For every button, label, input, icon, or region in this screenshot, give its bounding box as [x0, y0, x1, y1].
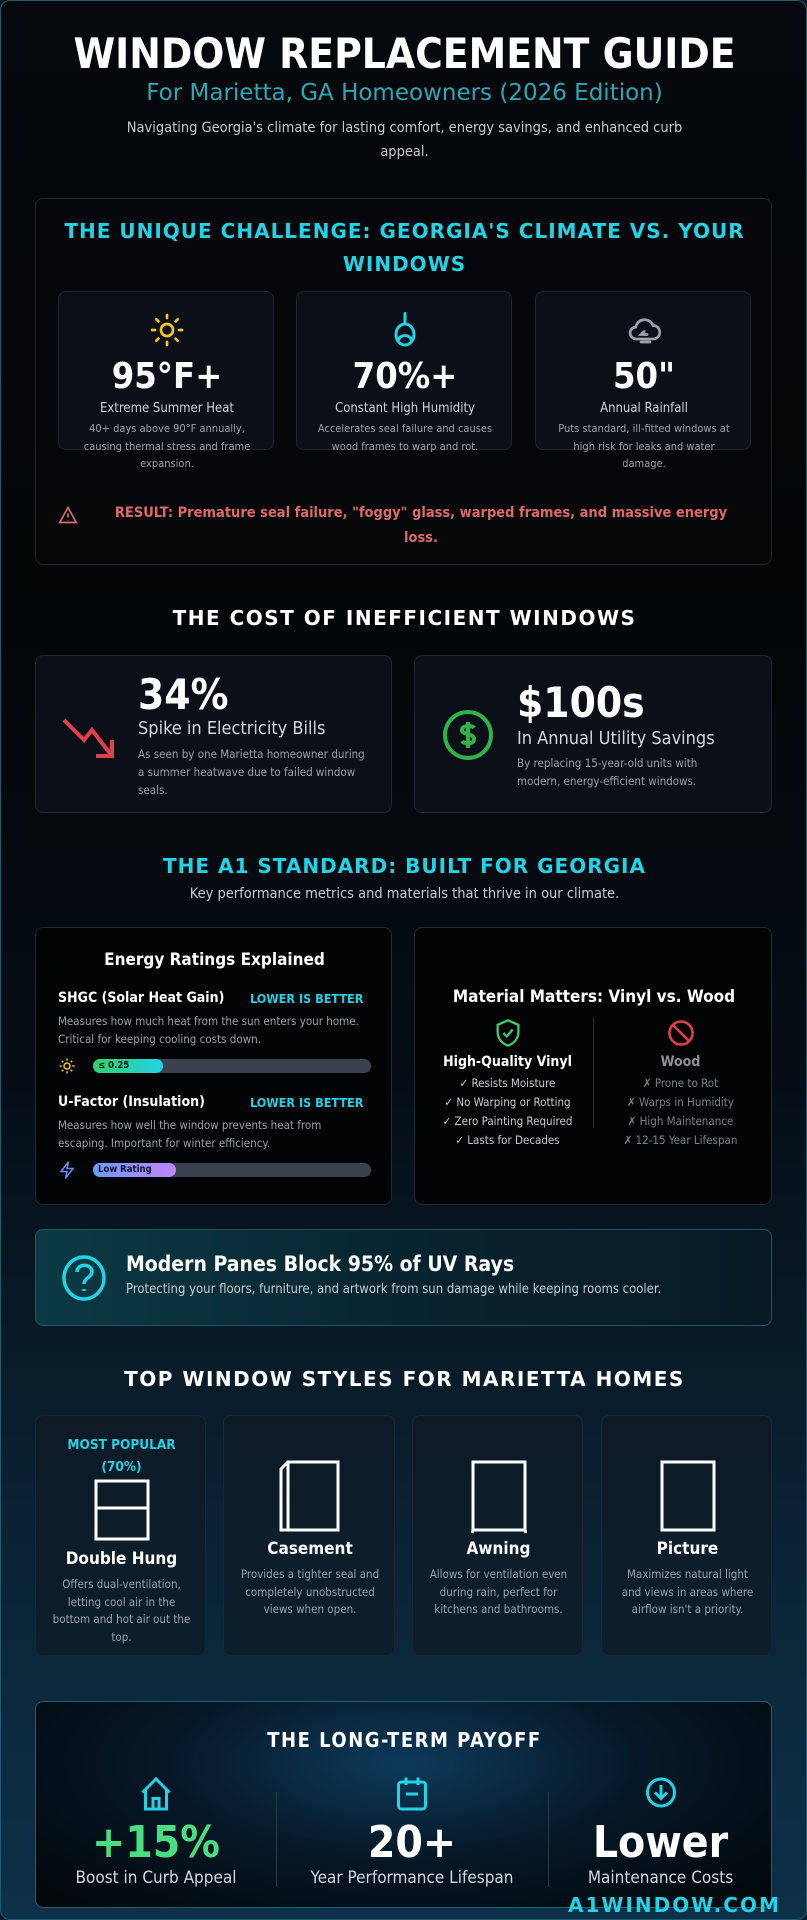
panel: materials: Material Matters: Vinyl vs. Wood — [453, 987, 735, 1007]
panel: energy ratings: Measures how much heat from the sun enters your home. Critical for keeping cooling costs down. — [58, 1014, 359, 1046]
card: picture — [601, 1415, 772, 1656]
stat: lifespan: 20+ — [368, 1817, 456, 1868]
stat: curb appeal — [76, 1777, 236, 1888]
result callout: RESULT: Premature seal failure, "foggy" glass, warped frames, and massive energy loss. — [115, 505, 727, 546]
icon: drop — [394, 312, 416, 346]
card: 34% — [35, 655, 392, 813]
panel: energy ratings: Measures how well the window prevents heat from escaping. Important for winter efficiency. — [58, 1118, 321, 1150]
panel: energy ratings: U-Factor (Insulation) — [58, 1094, 205, 1110]
column: vinyl: ✓ Lasts for Decades — [455, 1133, 560, 1147]
callout: UV rays: Protecting your floors, furniture, and artwork from sun damage while keeping rooms cooler. — [126, 1282, 661, 1297]
icon: sun — [150, 314, 184, 346]
icon: dollar circle — [443, 710, 493, 760]
stat: maintenance: Maintenance Costs — [588, 1868, 733, 1888]
callout: UV rays: Modern Panes Block 95% of UV Rays — [126, 1252, 514, 1276]
icon: warning — [58, 506, 78, 524]
card: $100s — [414, 655, 772, 813]
title: WINDOW REPLACEMENT GUIDE — [73, 29, 736, 78]
icon: trending down — [62, 718, 114, 758]
card: humidity: Constant High Humidity — [335, 401, 475, 416]
bar: SHGC — [60, 1058, 371, 1074]
card: double hung — [35, 1415, 206, 1656]
column: wood — [624, 1020, 737, 1147]
card: $100s: $100s — [517, 678, 645, 727]
panel: climate challenge — [35, 198, 772, 565]
stat: maintenance: Lower — [593, 1817, 728, 1868]
card: 34%: Spike in Electricity Bills — [138, 718, 325, 739]
stat: maintenance — [588, 1778, 733, 1888]
card: casement: Provides a tighter seal and completely unobstructed views when open. — [241, 1567, 379, 1616]
card: heat: 95°F+ — [112, 356, 222, 397]
card: double hung: MOST POPULAR — [67, 1437, 176, 1453]
card: heat: Extreme Summer Heat — [100, 401, 234, 416]
icon: question — [62, 1255, 106, 1301]
stat: curb appeal: Boost in Curb Appeal — [76, 1868, 236, 1888]
heading: A1 standard: THE A1 STANDARD: BUILT FOR GEORGIA — [163, 854, 646, 878]
panel: energy ratings: SHGC (Solar Heat Gain) — [58, 990, 224, 1006]
card: rainfall: 50" — [613, 356, 675, 397]
subheading: Key performance metrics and materials that thrive in our climate. — [190, 886, 619, 902]
card: picture: Maximizes natural light and views in areas where airflow isn't a priority. — [622, 1567, 753, 1616]
panel: energy ratings: LOWER IS BETTER — [250, 991, 363, 1006]
icon: cloud — [628, 318, 662, 344]
panel: materials — [414, 927, 772, 1205]
callout: UV rays — [35, 1229, 772, 1326]
card: rainfall: Puts standard, ill-fitted windows at high risk for leaks and water damage. — [558, 422, 730, 470]
column: vinyl: ✓ Zero Painting Required — [443, 1114, 572, 1128]
stat: lifespan: Year Performance Lifespan — [310, 1868, 514, 1888]
column: wood: ✗ Prone to Rot — [643, 1076, 718, 1090]
heading: window styles: TOP WINDOW STYLES FOR MARIETTA HOMES — [124, 1367, 685, 1391]
column: vinyl: ✓ Resists Moisture — [460, 1076, 555, 1090]
card: awning — [412, 1415, 583, 1656]
panel: long-term payoff — [35, 1701, 772, 1908]
card: picture: Picture — [657, 1539, 718, 1559]
card: 34%: 34% — [138, 670, 228, 719]
column: vinyl: ✓ No Warping or Rotting — [444, 1095, 571, 1109]
card: double hung: Double Hung — [66, 1549, 177, 1569]
column: wood: Wood — [661, 1054, 700, 1070]
panel: energy ratings: Energy Ratings Explained — [104, 950, 325, 970]
card: heat — [58, 291, 274, 450]
card: double hung: Offers dual-ventilation, letting cool air in the bottom and hot air out the top. — [53, 1577, 190, 1644]
column: vinyl — [443, 1019, 572, 1147]
card: rainfall — [535, 291, 751, 450]
card: awning: Awning — [467, 1539, 530, 1559]
card: heat: 40+ days above 90°F annually, causing thermal stress and frame expansion. — [84, 422, 250, 470]
bar: U-factor — [60, 1161, 371, 1179]
panel: energy ratings: LOWER IS BETTER — [250, 1095, 363, 1110]
card: humidity: Accelerates seal failure and causes wood frames to warp and rot. — [318, 422, 492, 452]
column: wood: ✗ High Maintenance — [628, 1114, 733, 1128]
card: casement: Casement — [267, 1539, 353, 1559]
column: wood: ✗ Warps in Humidity — [627, 1095, 734, 1109]
panel: energy ratings — [35, 927, 392, 1205]
card: 34%: As seen by one Marietta homeowner during a summer heatwave due to failed window seals. — [138, 747, 365, 797]
bar: SHGC: ≤ 0.25 — [98, 1060, 129, 1071]
column: wood: ✗ 12-15 Year Lifespan — [624, 1133, 737, 1147]
card: $100s: By replacing 15-year-old units with modern, energy-efficient windows. — [517, 756, 697, 788]
column: vinyl: High-Quality Vinyl — [443, 1054, 572, 1070]
stat: lifespan — [310, 1778, 514, 1888]
intro text: Navigating Georgia's climate for lasting comfort, energy savings, and enhanced curb appeal. — [127, 120, 682, 160]
heading: cost: THE COST OF INEFFICIENT WINDOWS — [173, 606, 636, 630]
panel: long-term payoff: THE LONG-TERM PAYOFF — [267, 1728, 542, 1752]
card: casement — [223, 1415, 395, 1656]
stat: curb appeal: +15% — [92, 1817, 220, 1868]
card: $100s: In Annual Utility Savings — [517, 728, 715, 749]
card: humidity: 70%+ — [353, 356, 457, 397]
card: humidity — [296, 291, 512, 450]
card: double hung: (70%) — [101, 1459, 142, 1475]
subtitle: For Marietta, GA Homeowners (2026 Edition) — [146, 80, 663, 106]
card: awning: Allows for ventilation even during rain, perfect for kitchens and bathrooms. — [430, 1567, 567, 1616]
heading: unique challenge: THE UNIQUE CHALLENGE: GEORGIA'S CLIMATE VS. YOUR WINDOWS — [64, 219, 745, 276]
brand: a1window.com: A1WINDOW.COM — [568, 1893, 781, 1917]
bar: U-factor: Low Rating — [98, 1164, 152, 1175]
card: rainfall: Annual Rainfall — [600, 401, 688, 416]
